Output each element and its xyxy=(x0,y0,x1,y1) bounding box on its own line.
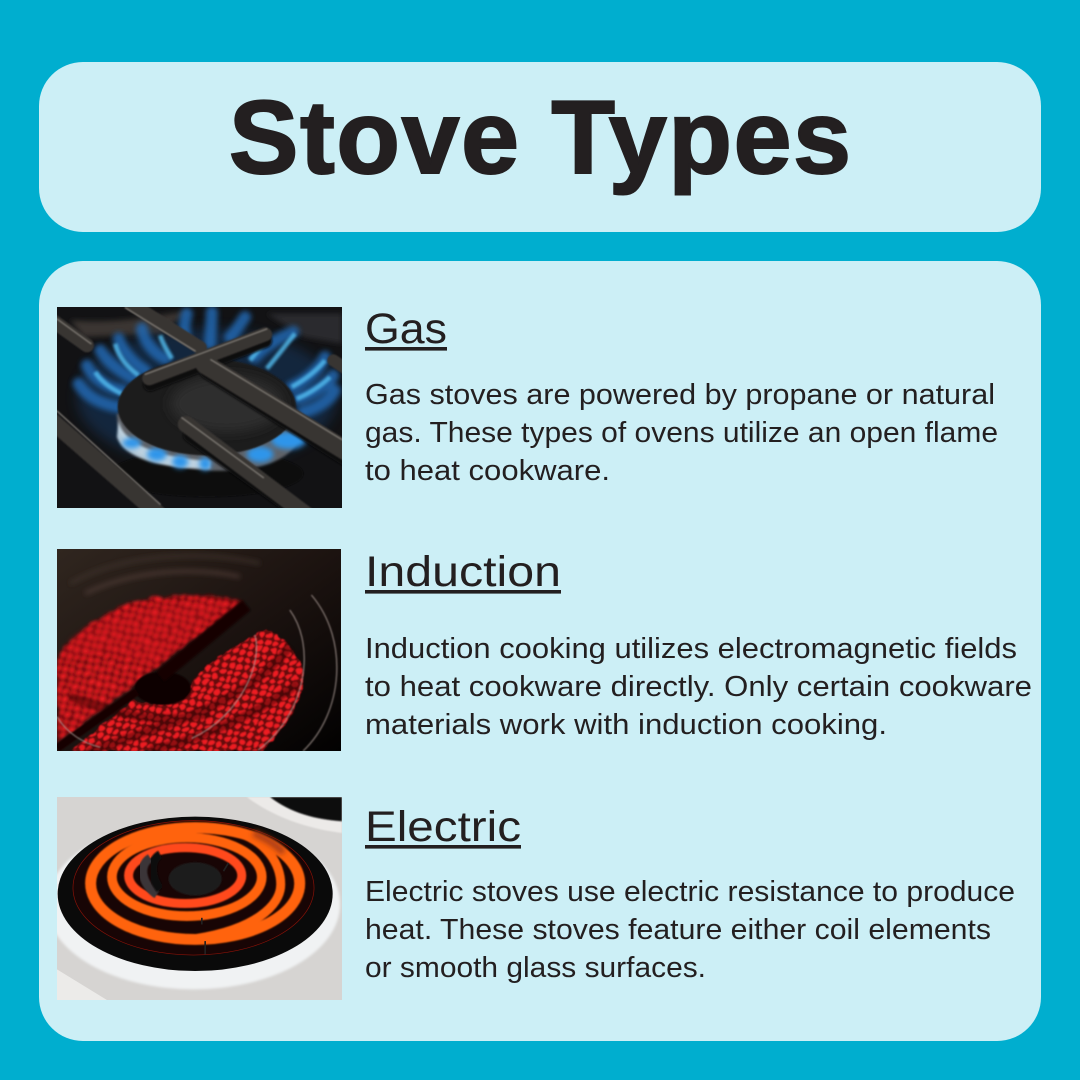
photo: electric coil xyxy=(57,797,342,1000)
text: induction description: materials work with induction cooking. xyxy=(365,709,887,741)
text: electric description: heat. These stoves feature either coil elements xyxy=(365,914,991,946)
photo: induction element xyxy=(57,549,341,751)
title panel xyxy=(39,62,1041,232)
text: electric description: Electric stoves use electric resistance to produce xyxy=(365,876,1015,908)
heading: Gas: Gas xyxy=(365,305,447,353)
text: induction description: to heat cookware directly. Only certain cookware xyxy=(365,671,1032,703)
heading: Electric: Electric xyxy=(365,803,521,851)
text: electric description xyxy=(365,876,1015,984)
text: induction description: Induction cooking utilizes electromagnetic fields xyxy=(365,633,1017,665)
text: gas description: gas. These types of ovens utilize an open flame xyxy=(365,417,998,449)
text: gas description xyxy=(365,379,998,487)
panel: stove types xyxy=(39,261,1041,1041)
heading: Induction: Induction xyxy=(365,548,561,596)
text: induction description xyxy=(365,633,1032,741)
photo: gas burner xyxy=(57,307,342,508)
title: Stove Types xyxy=(229,80,851,196)
grate bars xyxy=(57,307,342,508)
text: gas description: Gas stoves are powered by propane or natural xyxy=(365,379,995,411)
text: gas description: to heat cookware. xyxy=(365,455,610,487)
text: electric description: or smooth glass surfaces. xyxy=(365,952,706,984)
